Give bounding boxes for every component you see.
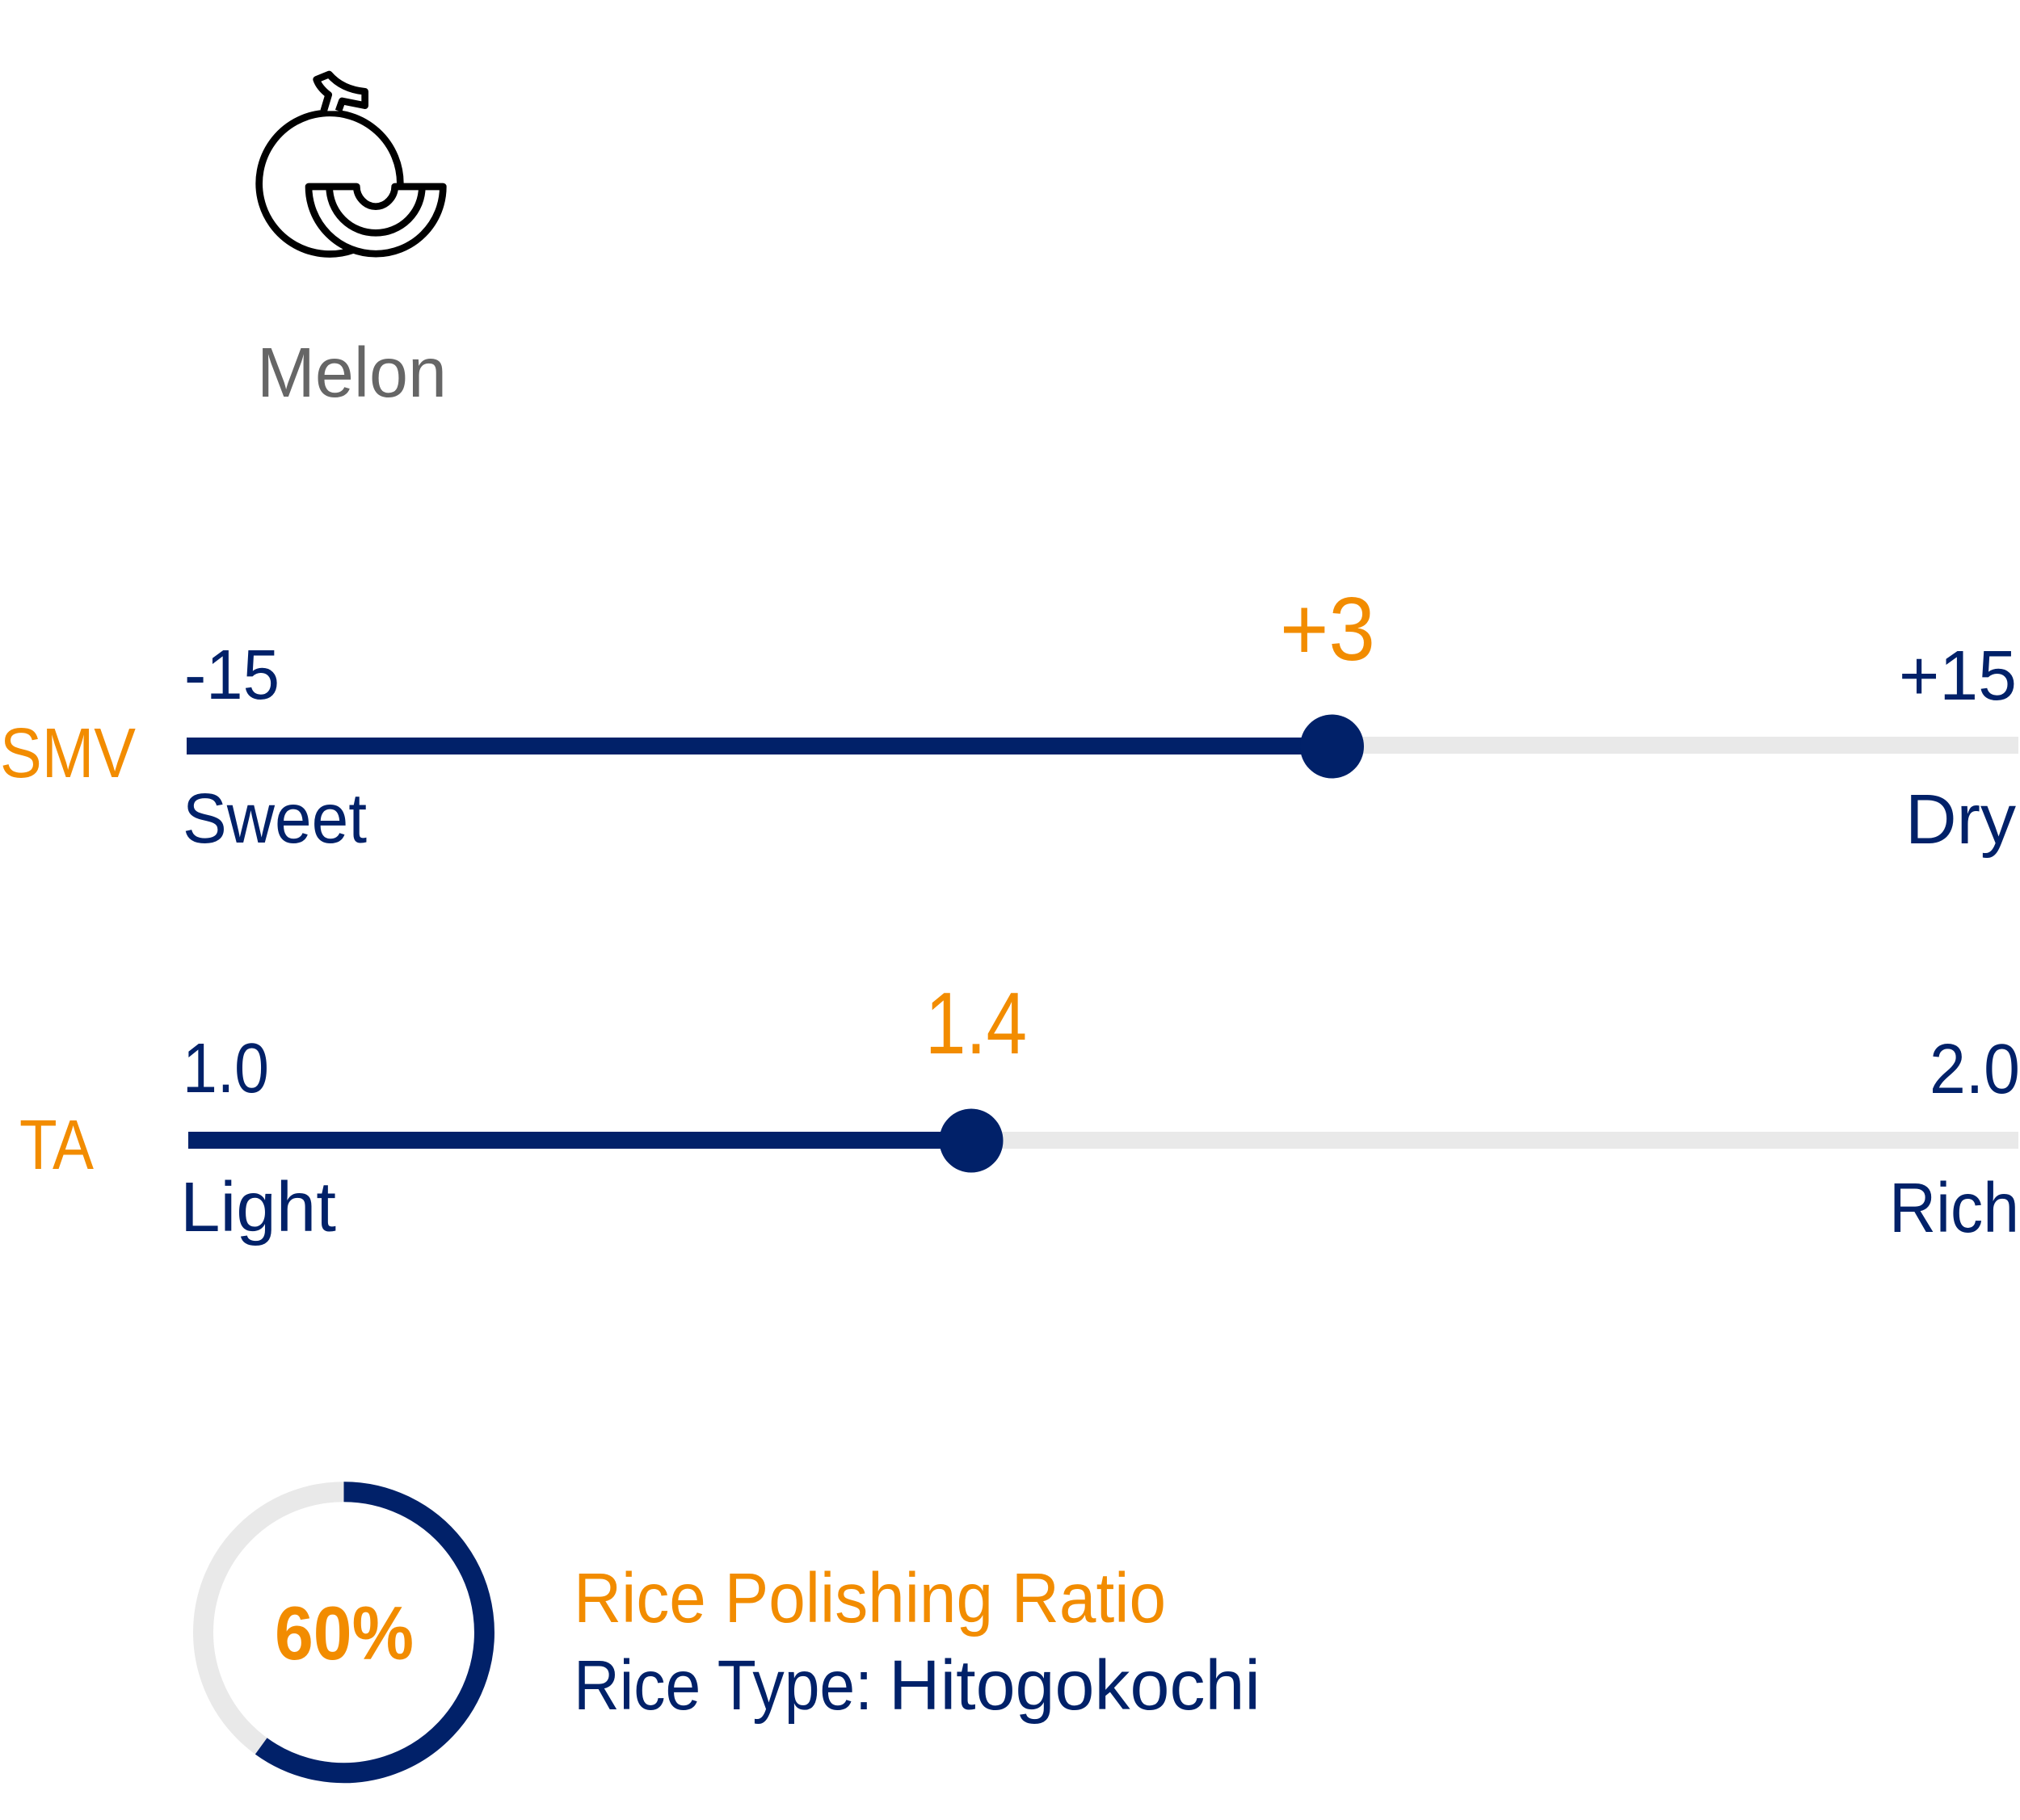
track: SMV remainder [1325,737,2018,754]
label: maximum +15: +15 [1899,637,2017,715]
label: Sweet: Sweet [183,780,367,858]
value: 60%: 60% [275,1591,414,1675]
label: Light: Light [180,1168,336,1246]
track: TA filled [188,1132,972,1149]
panel: flavour note melon [257,74,447,412]
heading: Rice Polishing Ratio: Rice Polishing Ratio [574,1559,1166,1637]
label: minimum -15: -15 [184,636,280,714]
label: minimum 1.0: 1.0 [183,1029,269,1108]
panel: SMV scale [0,579,2018,859]
label: TA: TA [19,1106,94,1184]
icon: melon [259,74,443,254]
text: Rice Type: Rice Type: [574,1646,873,1725]
label: Melon: Melon [257,334,447,412]
label: Dry: Dry [1905,780,2016,859]
panel: TA scale [19,974,2020,1247]
marker: SMV knob [1300,714,1364,779]
panel: rice polishing ratio [204,1492,1260,1773]
value: +3: +3 [1280,579,1375,679]
track: SMV filled [187,738,1332,754]
value: 1.4: 1.4 [925,974,1027,1073]
text: Rice Type [574,1646,1260,1725]
text: Rice Type: Hitogokochi [889,1646,1260,1725]
chart: donut 60 percent [204,1492,485,1773]
track: TA remainder [966,1132,2018,1149]
marker: TA knob [939,1108,1004,1173]
label: SMV: SMV [0,714,136,792]
